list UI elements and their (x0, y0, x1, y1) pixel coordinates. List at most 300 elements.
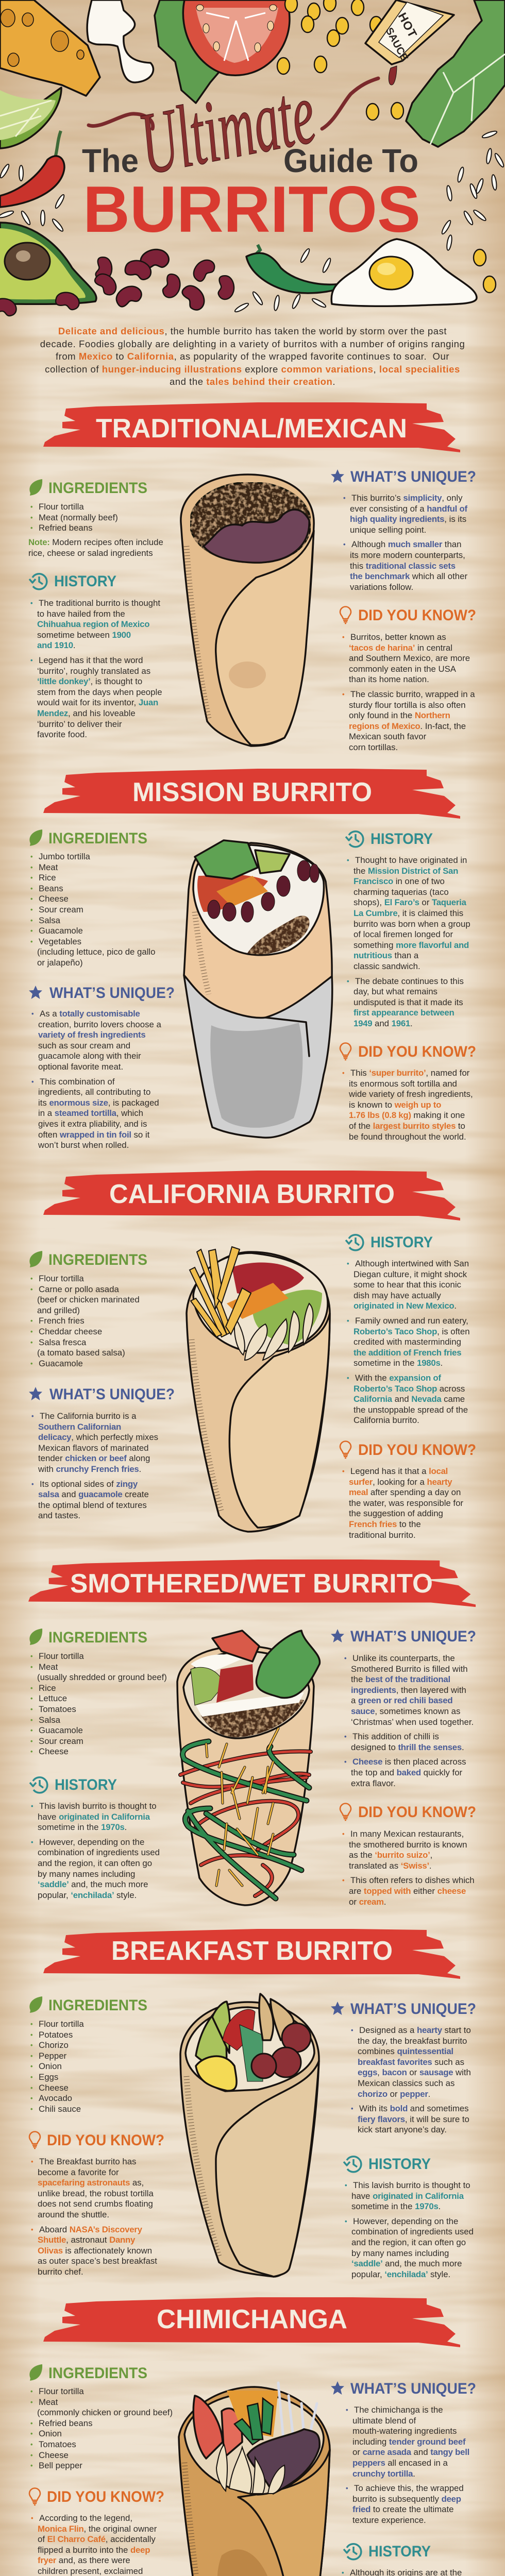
smothered: unique text (344, 1653, 474, 1788)
mission: ingredients list: Sour cream (39, 905, 83, 914)
traditional: history text: Legend has it that the word (39, 655, 143, 665)
california: unique text: tender chicken or beef along (38, 1453, 150, 1463)
mission: unique text: such as sour cream and (38, 1041, 130, 1050)
burrito: chimichanga (179, 2383, 330, 2576)
traditional: note (28, 537, 163, 558)
traditional: did you know text: only found in the Northern (349, 710, 450, 720)
breakfast: did you know text: become a favorite for (38, 2167, 119, 2177)
banner: mission burrito (43, 769, 460, 819)
mission: ingredients list: Meat (39, 862, 58, 872)
traditional: unique text: this traditional classic sets (350, 561, 456, 571)
heading: did you know, traditional: DID YOU KNOW? (358, 607, 476, 624)
traditional: did you know text: ‘tacos de harina’ in central (349, 643, 452, 653)
traditional: unique text: the benchmark which all other (350, 571, 467, 581)
california: did you know text: the suggestion of adding (349, 1509, 443, 1518)
heading: did you know, mission: DID YOU KNOW? (358, 1043, 476, 1060)
smothered: ingredients list: Guacamole (39, 1725, 83, 1735)
california: unique text (31, 1411, 158, 1520)
california: ingredients list (30, 1274, 140, 1368)
traditional: unique text: This burrito’s simplicity, only (351, 493, 462, 503)
chimichanga: unique text: including tender ground beef (352, 2437, 465, 2447)
icon: kidney beans (0, 245, 237, 316)
heading: history, breakfast: HISTORY (368, 2156, 431, 2173)
intro text: from Mexico to California, as popularity of the wrapped favorite continues to soar. Our (56, 351, 449, 362)
chimichanga: unique text: To achieve this, the wrapped (354, 2483, 464, 2493)
burrito: traditional (181, 474, 314, 746)
chimichanga: unique text: texture experience. (352, 2515, 426, 2525)
smothered: did you know text (342, 1829, 475, 1907)
smothered: history text: However, depending on the (39, 1837, 144, 1847)
mission: did you know text (342, 1068, 473, 1142)
mission: did you know text: This ‘super burrito’, named for (350, 1068, 469, 1078)
california: history text: California burrito. (354, 1415, 419, 1425)
smothered: unique text: the top and baked quickly for (351, 1768, 462, 1777)
california: unique text: Southern Californian (38, 1422, 121, 1432)
traditional: note: Note: Modern recipes often include (28, 537, 163, 547)
breakfast: unique text: Mexican classics such as (358, 2078, 454, 2088)
mission: unique text: optional favorite meat. (38, 1062, 123, 1072)
breakfast: unique text (351, 2025, 471, 2134)
california: did you know text: surfer, looking for a hearty (349, 1477, 452, 1487)
california: unique text: salsa and guacamole create (38, 1489, 149, 1499)
breakfast: ingredients list (30, 2019, 84, 2114)
breakfast: did you know text: Aboard NASA’s Discovery (39, 2225, 142, 2234)
breakfast: ingredients list: Pepper (39, 2051, 66, 2061)
heading: ingredients, california: INGREDIENTS (48, 1251, 147, 1268)
icon: hot sauce packet: HOT (396, 10, 420, 40)
smothered: ingredients list: Meat (39, 1662, 58, 1672)
traditional: did you know text: corn tortillas. (349, 742, 398, 752)
smothered: unique text: sauce, sometimes known as (351, 1706, 460, 1716)
smothered: unique text: Smothered Burrito is filled with (351, 1664, 468, 1674)
traditional: ingredients list: Flour tortilla (39, 502, 84, 512)
heading: history, california (346, 1234, 433, 1251)
heading: did you know, chimichanga: DID YOU KNOW? (47, 2488, 164, 2505)
mission: history text: first appearance between (354, 1008, 454, 1018)
intro text: decade. Foodies globally are delighting in a variety of burritos with a number of origins ranging (40, 338, 465, 349)
chimichanga: did you know text: fryer and, as there were (38, 2555, 130, 2565)
traditional: ingredients list: Meat (normally beef) (39, 513, 118, 522)
california: did you know text: traditional burrito. (349, 1530, 416, 1540)
breakfast: unique text: chorizo or pepper. (358, 2089, 430, 2099)
california: history text: sometime in the 1980s. (354, 1358, 443, 1368)
breakfast: history text: have originated in California (351, 2191, 464, 2201)
smothered: history text: ‘saddle’ and, the much more (38, 1879, 148, 1889)
california: unique text: and tastes. (38, 1511, 80, 1520)
heading: history, traditional (29, 573, 116, 590)
heading: history, chimichanga (344, 2543, 431, 2560)
breakfast: unique text: fiery flavors, it will be sure to (358, 2114, 469, 2124)
breakfast: history text: by many names including (351, 2248, 449, 2258)
burrito: mission (184, 840, 332, 1138)
breakfast: did you know text: unlike bread, the robust tortilla (38, 2189, 154, 2198)
california: ingredients list: Flour tortilla (39, 1274, 84, 1283)
icon: hot sauce packet: SAUCE (383, 26, 410, 63)
chimichanga: did you know text: of El Charro Café, accidentally (38, 2534, 156, 2544)
traditional: unique text (343, 493, 468, 592)
california: history text (347, 1259, 470, 1425)
banner: smothered burrito (28, 1560, 476, 1607)
heading: unique, breakfast: WHAT’S UNIQUE? (350, 2001, 476, 2018)
mission: history text: charming taquerias (taco (354, 887, 449, 897)
chimichanga: ingredients list: Refried beans (39, 2418, 92, 2428)
mission: ingredients list (30, 852, 156, 968)
breakfast: did you know text (31, 2157, 157, 2277)
mission: ingredients list: Beans (39, 884, 63, 893)
smothered: unique text: designed to thrill the senses. (351, 1742, 464, 1752)
intro text: collection of hunger-inducing illustrations explore common variations, local specialities (45, 364, 460, 375)
breakfast: did you know text: The Breakfast burrito has (39, 2157, 136, 2166)
heading: did you know, breakfast: DID YOU KNOW? (47, 2132, 164, 2149)
mission: history text: of local firemen longed for (354, 929, 453, 939)
mission: ingredients list: Salsa (39, 916, 60, 925)
icon: red chili (0, 131, 64, 207)
smothered: unique text: a green or red chili based (351, 1696, 452, 1705)
smothered: unique text: ingredients, then layered with (351, 1685, 466, 1695)
traditional: unique text: high quality ingredients, is its (350, 514, 466, 524)
traditional: history text: Chihuahua region of Mexico (37, 619, 149, 629)
chimichanga: ingredients list: Flour tortilla (39, 2386, 84, 2396)
breakfast: unique text: eggs, bacon or sausage with (358, 2067, 471, 2077)
california: ingredients list: Carne or pollo asada (39, 1284, 119, 1294)
traditional: did you know text (342, 632, 475, 752)
smothered: ingredients list: Flour tortilla (39, 1651, 84, 1661)
heading: did you know, smothered: DID YOU KNOW? (358, 1804, 476, 1821)
mission: ingredients list: Jumbo tortilla (39, 852, 90, 861)
heading: history, mission (346, 831, 433, 848)
mission: did you know text: 1.76 lbs (0.8 kg) making it one (349, 1110, 465, 1120)
smothered: history text: sometime in the 1970s. (38, 1822, 127, 1832)
mission: ingredients list: (including lettuce, pico de gallo (37, 947, 156, 957)
traditional: did you know text: sturdy flour tortilla is also often (349, 700, 466, 710)
smothered: history text: and the region, it can often go (38, 1858, 152, 1868)
traditional: history text: to have hailed from the (37, 609, 125, 619)
chimichanga: unique text: or carne asada and tangy bell (352, 2447, 469, 2457)
heading: did you know, california: DID YOU KNOW? (358, 1442, 476, 1459)
mission: history text: Francisco in one of two (354, 876, 445, 886)
chimichanga: did you know text: According to the legend, (39, 2513, 132, 2523)
traditional: unique text: its more modern counterparts, (350, 550, 465, 560)
title (82, 64, 420, 246)
chimichanga: ingredients list (37, 2386, 173, 2471)
icon: hot sauce packet (365, 0, 454, 85)
chimichanga: ingredients list: (commonly chicken or ground beef) (37, 2408, 173, 2417)
icon: tomato slice (183, 0, 290, 75)
banner: traditional/mexican (43, 402, 460, 452)
heading: history, breakfast (344, 2156, 431, 2173)
chimichanga: ingredients list: Tomatoes (39, 2439, 76, 2449)
smothered: history text: popular, ‘enchilada’ style. (38, 1890, 137, 1900)
breakfast: ingredients list: Chili sauce (39, 2104, 81, 2114)
smothered: ingredients list: Lettuce (39, 1693, 67, 1703)
mission: history text: burrito was born when a group (354, 919, 470, 929)
traditional: history text: ‘burrito’ to deliver their (37, 719, 122, 729)
california: history text: some to hear that this iconic (354, 1280, 461, 1290)
icon: corn kernels (277, 0, 496, 293)
smothered: did you know text: This often refers to dishes which (350, 1875, 475, 1885)
mission: ingredients list: Guacamole (39, 926, 83, 936)
banner: chimichanga: CHIMICHANGA (157, 2304, 347, 2334)
icon: lettuce right (406, 0, 505, 147)
breakfast: ingredients list: Chorizo (39, 2040, 69, 2050)
california: history text: Diegan culture, it might shock (354, 1269, 467, 1279)
california: history text: Although intertwined with San (355, 1259, 469, 1268)
heading: ingredients, breakfast: INGREDIENTS (48, 1997, 147, 2014)
traditional: did you know text: and Southern Mexico, are more (349, 653, 470, 663)
mission: ingredients list: Vegetables (39, 937, 81, 946)
california: history text: originated in New Mexico. (354, 1301, 457, 1311)
heading: unique, smothered: WHAT’S UNIQUE? (350, 1628, 476, 1645)
heading: history, smothered: HISTORY (55, 1776, 117, 1793)
breakfast: history text: popular, ‘enchilada’ style. (351, 2269, 450, 2279)
california: ingredients list: (beef or chicken marinated (37, 1295, 140, 1304)
mission: history text: classic sandwich. (354, 961, 420, 971)
mission: ingredients list: or jalapeño) (37, 958, 83, 968)
smothered: unique text: This addition of chilli is (352, 1732, 439, 1741)
heading: history, california: HISTORY (371, 1234, 433, 1251)
heading: unique, chimichanga: WHAT’S UNIQUE? (350, 2380, 476, 2397)
chimichanga: ingredients list: Meat (39, 2397, 58, 2407)
chimichanga: unique text: crunchy tortilla. (352, 2469, 415, 2479)
california: history text: California and Nevada came (354, 1394, 465, 1404)
california: did you know text: French fries to the (349, 1519, 421, 1529)
intro text: Delicate and delicious, the humble burrito has taken the world by storm over the past (58, 326, 447, 336)
mission: unique text: in a steamed tortilla, which (38, 1108, 143, 1118)
breakfast: did you know text: does not send crumbs floating (38, 2199, 153, 2209)
breakfast: did you know text: as outer space’s best breakfast (38, 2256, 157, 2266)
mission: unique text: gives it extra pliability, and is (38, 1119, 147, 1129)
mission: did you know text: is known to weigh up to (349, 1100, 441, 1110)
traditional: did you know text: commonly eaten in the USA (349, 664, 456, 674)
breakfast: ingredients list: Avocado (39, 2093, 72, 2103)
smothered: did you know text: translated as ‘Swiss’. (349, 1861, 432, 1871)
icon: sour cream (87, 0, 154, 82)
california: ingredients list: and grilled) (37, 1306, 80, 1315)
mission: history text: shops), El Faro’s or Taqueria (354, 897, 466, 907)
mission: history text: The debate continues to this (355, 976, 464, 986)
heading: ingredients, mission: INGREDIENTS (48, 830, 147, 847)
mission: unique text: guacamole along with their (38, 1051, 141, 1061)
chimichanga: unique text (352, 2405, 469, 2530)
mission: did you know text: its enormous soft tortilla and (349, 1079, 457, 1089)
icon: lettuce left (155, 0, 219, 103)
california: history text: credited with masterminding (354, 1337, 461, 1347)
smothered: history text (31, 1801, 160, 1900)
breakfast: unique text: the day, the breakfast burrito (358, 2036, 467, 2046)
smothered: ingredients list: Salsa (39, 1715, 60, 1725)
california: unique text: delicacy, which perfectly mixes (38, 1432, 158, 1442)
chimichanga: unique text: fried to create the ultimate (352, 2504, 453, 2514)
traditional: unique text: ever consisting of a handful of (350, 504, 467, 514)
california: did you know text: meal after spending a day on (349, 1487, 461, 1497)
smothered: history text: This lavish burrito is thought to (39, 1801, 157, 1811)
chimichanga: did you know text (38, 2513, 157, 2576)
california: ingredients list: (a tomato based salsa) (37, 1348, 125, 1358)
banner: smothered burrito: SMOTHERED/WET BURRITO (70, 1569, 433, 1599)
california: did you know text: Legend has it that a local (350, 1466, 448, 1476)
california: ingredients list: Cheddar cheese (39, 1327, 102, 1336)
california: unique text: Mexican flavors of marinated (38, 1443, 149, 1453)
california: history text: With the expansion of (355, 1373, 441, 1383)
mission: did you know text: of the largest burrito styles to (349, 1121, 465, 1131)
heading: unique, mission: WHAT’S UNIQUE? (49, 985, 175, 1002)
traditional: did you know text: than its home nation. (349, 674, 429, 684)
smothered: did you know text: or cream. (349, 1897, 386, 1907)
traditional: history text: and 1910. (37, 640, 76, 650)
mission: history text: the Mission District of San (354, 866, 458, 876)
title: The (82, 142, 139, 179)
icon: rice grains (0, 130, 505, 313)
title: Guide To (283, 142, 418, 179)
traditional: note: rice, cheese or salad ingredients (28, 548, 153, 558)
chimichanga: unique text: ultimate blend of (352, 2416, 416, 2426)
title: Ultimate (132, 64, 323, 193)
traditional: history text: stem from the days when people (37, 687, 162, 697)
heading: unique, california: WHAT’S UNIQUE? (49, 1386, 175, 1403)
burrito: california (187, 1247, 330, 1532)
banner: breakfast burrito (43, 1929, 460, 1979)
traditional: did you know text: Mexican south favor (349, 732, 426, 741)
breakfast: ingredients list: Cheese (39, 2083, 69, 2093)
mission: history text: 1949 and 1961. (354, 1019, 413, 1028)
smothered: unique text: Cheese is then placed across (352, 1757, 466, 1767)
breakfast: ingredients list: Eggs (39, 2072, 58, 2082)
banner: mission burrito: MISSION BURRITO (132, 777, 372, 807)
breakfast: history text (351, 2180, 474, 2284)
traditional: history text: ‘burrito’, roughly translated as (37, 666, 150, 676)
chimichanga: unique text: mouth-watering ingredients (352, 2426, 457, 2436)
heading: ingredients, chimichanga: INGREDIENTS (48, 2365, 147, 2382)
california: ingredients list: Salsa fresca (39, 1337, 86, 1347)
mission: unique text: creation, burrito lovers choose a (38, 1020, 161, 1029)
banner: california burrito: CALIFORNIA BURRITO (109, 1179, 395, 1209)
mission: history text: day, but what remains (354, 987, 437, 996)
heading: history, smothered (30, 1776, 117, 1793)
breakfast: history text: ‘saddle’ and, the much more (351, 2259, 462, 2268)
traditional: history text: Mendez, and his loveable (37, 708, 136, 718)
banner: chimichanga (43, 2297, 460, 2347)
title: BURRITOS (83, 173, 420, 246)
mission: ingredients list: Cheese (39, 894, 69, 904)
chimichanga: did you know text: Monica Flin, the original owner (38, 2524, 157, 2534)
smothered: did you know text: as the ‘burrito suizo’, (349, 1850, 432, 1860)
smothered: ingredients list: Rice (39, 1683, 56, 1693)
california: unique text: the optimal blend of textures (38, 1500, 147, 1510)
breakfast: ingredients list: Onion (39, 2061, 62, 2071)
california: unique text: with crunchy French fries. (38, 1464, 141, 1474)
chimichanga: ingredients list: Bell pepper (39, 2461, 82, 2470)
breakfast: unique text: breakfast favorites such as (358, 2057, 464, 2067)
traditional: history text: would wait for its inventor, Juan (37, 698, 158, 707)
smothered: ingredients list: (usually shredded or ground beef) (37, 1672, 167, 1682)
smothered: history text: have originated in California (38, 1812, 150, 1822)
banner: breakfast burrito: BREAKFAST BURRITO (111, 1936, 393, 1966)
breakfast: did you know text: burrito chef. (38, 2267, 83, 2277)
heading: history, chimichanga: HISTORY (368, 2543, 431, 2560)
traditional: did you know text: Burritos, better known as (350, 632, 446, 642)
smothered: unique text: Unlike its counterparts, the (352, 1653, 455, 1663)
mission: unique text: variety of fresh ingredients (38, 1030, 145, 1040)
traditional: unique text: Although much smaller than (351, 539, 461, 549)
breakfast: history text: sometime in the 1970s. (351, 2201, 441, 2211)
breakfast: did you know text: Shuttle, astronaut Danny (38, 2235, 135, 2245)
mission: history text: La Cumbre, it is claimed this (354, 908, 463, 918)
breakfast: history text: However, depending on the (353, 2216, 458, 2226)
breakfast: history text: combination of ingredients used (351, 2227, 474, 2236)
traditional: history text: favorite food. (37, 730, 87, 739)
traditional: history text: ‘little donkey’, is thought to (37, 676, 142, 686)
mission: unique text (31, 1009, 161, 1150)
california: unique text: Its optional sides of zingy (40, 1479, 138, 1489)
smothered: ingredients list: Sour cream (39, 1736, 83, 1746)
breakfast: ingredients list: Flour tortilla (39, 2019, 84, 2029)
icon: cheese wedge (0, 0, 100, 96)
mission: history text: Thought to have originated in (355, 855, 467, 865)
breakfast: unique text: Designed as a hearty start to (359, 2025, 471, 2035)
california: did you know text (342, 1466, 463, 1540)
heading: history, traditional: HISTORY (54, 573, 116, 590)
traditional: unique text: variations follow. (350, 582, 413, 592)
burrito: breakfast (180, 1994, 319, 2277)
smothered: unique text: the best of the traditional (351, 1674, 450, 1684)
mission: ingredients list: Rice (39, 873, 56, 883)
chimichanga: did you know text: flipped a burrito into the deep (38, 2545, 150, 2555)
smothered: ingredients list (30, 1651, 167, 1756)
burrito: smothered (177, 1631, 319, 1905)
california: history text: the unstoppable spread of the (354, 1405, 468, 1415)
breakfast: did you know text: around the shuttle. (38, 2210, 109, 2219)
mission: did you know text: wide variety of fresh ingredients, (349, 1089, 473, 1099)
mission: history text: undisputed is that it made its (354, 997, 463, 1007)
traditional: ingredients list (30, 502, 118, 533)
mission: history text: nutritious than a (354, 951, 418, 960)
smothered: unique text: extra flavor. (351, 1778, 396, 1788)
chimichanga: unique text: peppers all encased in a (352, 2458, 448, 2468)
smothered: did you know text: the smothered burrito is known (349, 1840, 467, 1850)
breakfast: history text: This lavish burrito is thought to (353, 2180, 470, 2190)
smothered: history text: by many names including (38, 1869, 135, 1879)
intro text: and the tales behind their creation. (170, 376, 335, 387)
smothered: did you know text: In many Mexican restaurants, (350, 1829, 464, 1839)
smothered: unique text: ‘Christmas’ when used together. (351, 1717, 474, 1727)
intro text (40, 326, 465, 387)
traditional: history text: The traditional burrito is thought (39, 598, 160, 608)
california: unique text: The California burrito is a (40, 1411, 136, 1421)
smothered: did you know text: are topped with either cheese (349, 1886, 466, 1896)
breakfast: unique text: kick start anyone’s day. (358, 2125, 447, 2134)
california: history text: Family owned and run eatery, (355, 1316, 468, 1326)
chimichanga: ingredients list: Cheese (39, 2450, 69, 2460)
traditional: did you know text: regions of Mexico. In-fact, the (349, 721, 466, 731)
heading: ingredients, traditional: INGREDIENTS (48, 480, 147, 497)
mission: history text (347, 855, 470, 1028)
traditional: history text: sometime between 1900 (37, 630, 131, 640)
icon: jalapeno (246, 245, 352, 293)
banner: traditional/mexican: TRADITIONAL/MEXICAN (96, 414, 407, 444)
california: did you know text: the water, was responsible for (349, 1498, 463, 1508)
mission: unique text: won’t burst when rolled. (38, 1140, 129, 1150)
mission: unique text: This combination of (40, 1077, 115, 1087)
heading: ingredients, smothered: INGREDIENTS (48, 1629, 147, 1646)
mission: unique text: ingredients, all contributing to (38, 1087, 150, 1097)
smothered: ingredients list: Cheese (39, 1747, 69, 1756)
icon: avocado (0, 223, 96, 304)
heading: unique, traditional: WHAT’S UNIQUE? (350, 468, 476, 485)
heading: history, mission: HISTORY (371, 831, 433, 848)
breakfast: history text: and the region, it can often go (351, 2238, 466, 2247)
california: ingredients list: Guacamole (39, 1359, 83, 1368)
california: history text: dish may have actually (354, 1291, 441, 1300)
